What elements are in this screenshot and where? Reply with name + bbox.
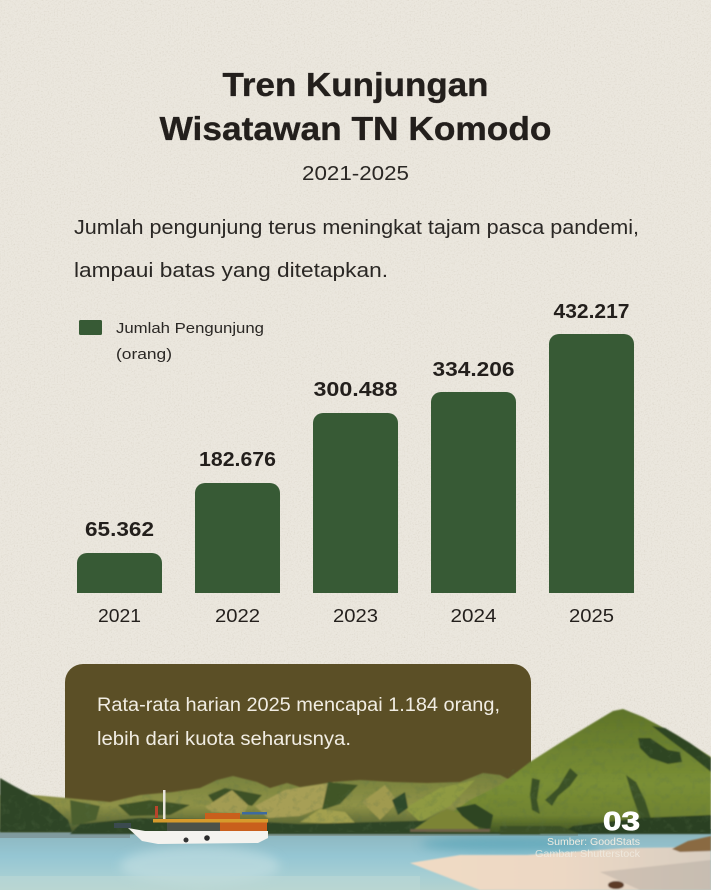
bar 2024 (431, 359, 516, 626)
water (0, 829, 711, 890)
title (160, 66, 552, 147)
source credit (535, 836, 641, 860)
page number: 03 (603, 806, 640, 836)
bar 2022: 182.676 (199, 449, 276, 471)
legend: Jumlah Pengunjung (116, 320, 264, 337)
small foreground hill (410, 804, 493, 832)
boat (114, 790, 268, 844)
legend: (orang) (116, 346, 172, 363)
bar 2025 (549, 301, 634, 626)
bar 2024: 2024 (450, 606, 496, 626)
intro text: lampaui batas yang ditetapkan. (74, 260, 388, 282)
large mountain (425, 709, 711, 834)
bar 2023: 300.488 (314, 379, 398, 401)
legend (79, 320, 264, 363)
bar 2023 (313, 379, 398, 626)
bar 2024: 334.206 (432, 359, 514, 381)
title: Tren Kunjungan (222, 66, 488, 103)
bar 2025: 432.217 (554, 301, 630, 323)
callout (65, 664, 531, 850)
intro text: Jumlah pengunjung terus meningkat tajam pasca pandemi, (74, 217, 639, 239)
source credit: Sumber: GoodStats (547, 836, 640, 848)
left hill (0, 778, 72, 832)
callout: Rata-rata harian 2025 mencapai 1.184 orang, (97, 695, 500, 716)
vegetation dapple (4, 711, 711, 832)
source credit: Gambar: Shutterstock (535, 848, 641, 860)
bar chart (77, 301, 634, 626)
bar 2022 (195, 449, 280, 626)
title: Wisatawan TN Komodo (160, 110, 552, 147)
bar 2021: 65.362 (85, 519, 154, 541)
bar 2022: 2022 (215, 606, 260, 626)
middle hills (0, 773, 540, 834)
intro text (74, 217, 639, 282)
callout: lebih dari kuota seharusnya. (97, 729, 351, 750)
beach (410, 836, 711, 890)
bar 2025: 2025 (569, 606, 614, 626)
bar 2023: 2023 (333, 606, 378, 626)
landscape photo (0, 700, 711, 890)
subtitle: year range: 2021-2025 (302, 163, 409, 185)
bar 2021: 2021 (98, 606, 141, 626)
bar 2021 (77, 519, 162, 626)
